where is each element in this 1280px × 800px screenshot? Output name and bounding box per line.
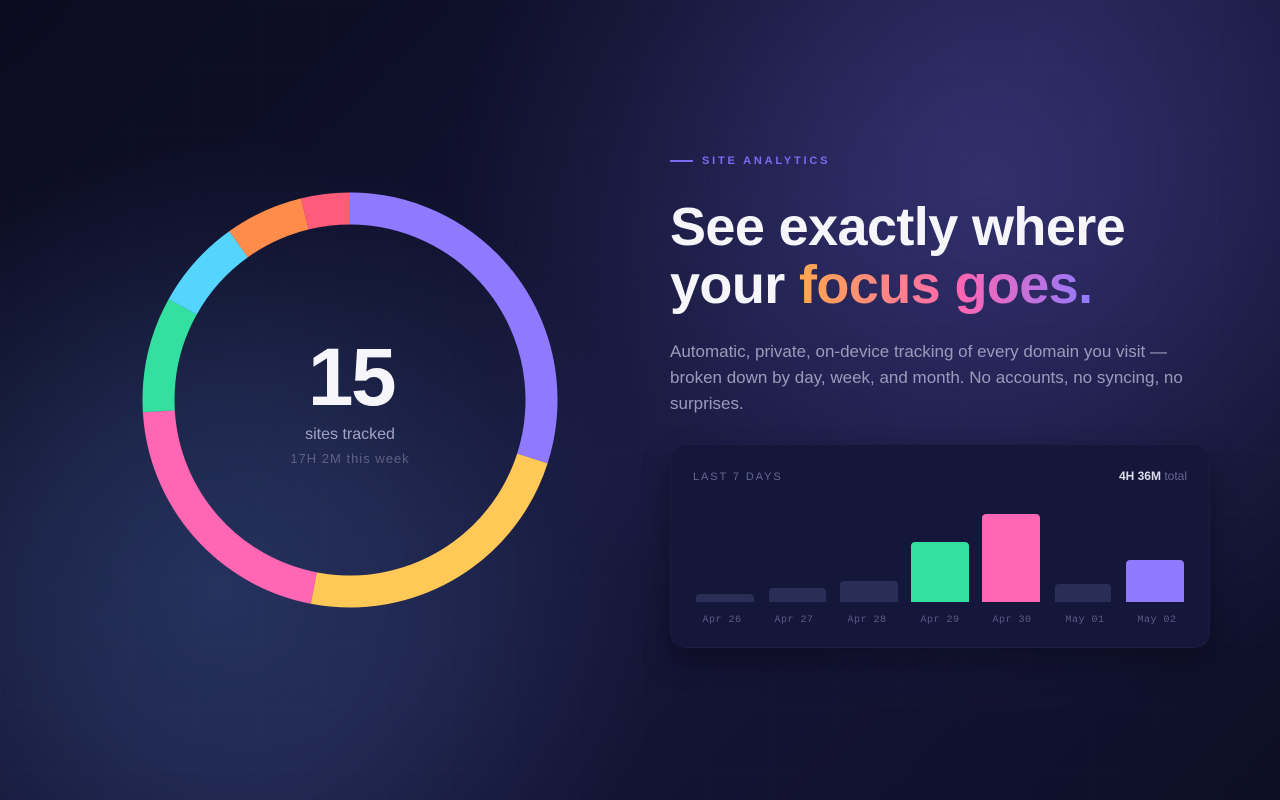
donut value: 15 [308,332,394,423]
panel heading: LAST 7 DAYS [693,471,783,483]
bar chart: May 01 [1065,615,1104,626]
bar chart: Apr 29 [920,615,960,626]
donut label: sites tracked [305,426,395,443]
eyebrow text: SITE ANALYTICS [702,155,830,167]
bar chart: Apr 30 [992,615,1032,626]
description: surprises. [670,394,744,413]
donut chart: sites tracked [142,192,558,608]
title [670,197,1125,315]
title: your focus goes. [670,255,1092,315]
bar chart: Apr 26 [702,615,742,626]
description: broken down by day, week, and month. No accounts, no syncing, no [670,368,1183,387]
bar chart: May 02 [1137,615,1176,626]
panel total: 4H 36M total [1119,469,1187,483]
donut sublabel: 17H 2M this week [290,451,410,466]
description: Automatic, private, on-device tracking of every domain you visit — [670,342,1167,361]
title: See exactly where [670,197,1125,257]
donut ring [142,192,558,608]
bar chart: Apr 27 [774,615,814,626]
description [670,342,1183,413]
panel: last 7 days [670,444,1210,648]
bar chart: Apr 28 [847,615,886,626]
eyebrow line [670,160,693,162]
